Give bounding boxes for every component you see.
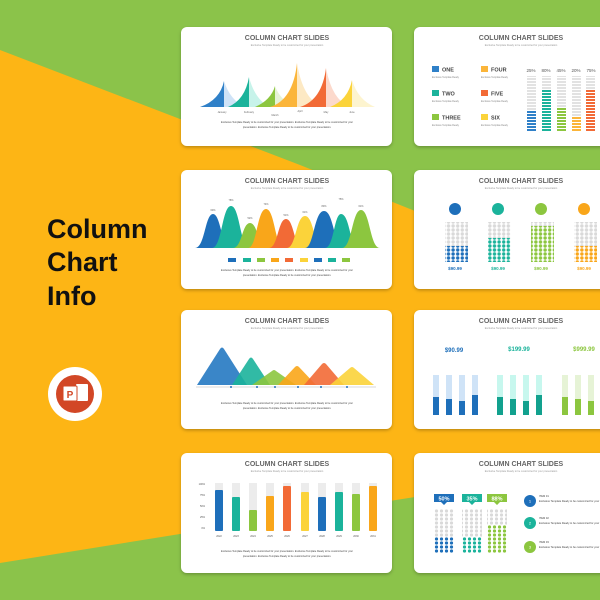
panel: card 3 bell curves: 61%	[358, 205, 364, 208]
panel: card 3 bell curves: Exclusive Template Ready to be customized for your presentation. Exclusive Template Ready to be customized for your	[221, 269, 353, 272]
panel: card 1 shark fin chart: January	[218, 111, 227, 114]
panel: card 4 dot grids with icons: COLUMN CHART SLIDES	[479, 178, 564, 185]
title: Column Chart Info	[47, 214, 148, 311]
panel: card 4 dot grids with icons: Exclusive Template Ready to be customized for your presentation	[485, 187, 558, 190]
panel: card 8 dot percentages: 3	[529, 544, 532, 550]
panel: card 2 striped bars: FIVE	[491, 92, 504, 98]
panel: card 1 shark fin chart: March	[272, 114, 279, 117]
panel: card 7 bar chart: Exclusive Template Ready to be customized for your presentation	[251, 470, 324, 473]
panel: card 7 bar chart: 2022	[216, 535, 222, 538]
panel: card 7 bar chart: 25%	[200, 516, 206, 519]
panel: card 3 bell curves: 61%	[302, 211, 308, 214]
panel: card 8 dot percentages	[414, 453, 600, 573]
panel: card 5 mountains: Exclusive Template Ready to be customized for your presentation	[251, 327, 324, 330]
panel: card 6 pricing bars: $90.99	[445, 348, 464, 354]
panel: card 1 shark fin chart: presentation. Exclusive Template Ready to be customized for your presentation.	[243, 126, 331, 129]
panel: card 4 dot grids with icons	[414, 170, 600, 289]
panel: card 5 mountains	[181, 310, 392, 429]
panel: card 7 bar chart: 75%	[200, 494, 206, 497]
panel: card 7 bar chart	[181, 453, 392, 573]
panel: card 1 shark fin chart: June	[349, 111, 355, 114]
panel: card 8 dot percentages: ITEM 03	[539, 540, 549, 544]
panel: card 3 bell curves: 74%	[263, 203, 269, 206]
panel: card 2 striped bars: THREE	[442, 116, 461, 122]
panel: card 1 shark fin chart: COLUMN CHART SLIDES	[245, 35, 330, 42]
panel: card 7 bar chart: COLUMN CHART SLIDES	[245, 461, 330, 468]
panel: card 3 bell curves	[181, 170, 392, 289]
panel: card 2 striped bars: Exclusive Template Ready	[481, 124, 509, 127]
panel: card 2 striped bars: Exclusive Template Ready	[481, 100, 509, 103]
panel: card 5 mountains: COLUMN CHART SLIDES	[245, 318, 330, 325]
panel: card 7 bar chart: 2031	[370, 535, 376, 538]
panel: card 8 dot percentages: 1	[529, 498, 532, 504]
title: Column Chart Info: Column	[47, 214, 148, 244]
icon: powerpoint	[48, 367, 102, 421]
icon: powerpoint: P	[67, 390, 74, 401]
panel: card 1 shark fin chart: May	[324, 111, 329, 114]
panel: card 5 mountains: Exclusive Template Ready to be customized for your presentation. Exclusive Template Ready to be customized for your	[221, 402, 353, 405]
panel: card 8 dot percentages: 2	[529, 520, 532, 526]
panel: card 1 shark fin chart	[181, 27, 392, 146]
panel: card 3 bell curves: Exclusive Template Ready to be customized for your presentation	[251, 187, 324, 190]
panel: card 4 dot grids with icons: $90.99	[448, 266, 462, 271]
panel: card 6 pricing bars: COLUMN CHART SLIDES	[479, 318, 564, 325]
panel: card 4 dot grids with icons: $90.99	[534, 266, 548, 271]
panel: card 2 striped bars: Exclusive Template Ready	[432, 124, 460, 127]
panel: card 7 bar chart: 2023	[233, 535, 239, 538]
panel: card 8 dot percentages: Exclusive Template Ready to be customized for your	[539, 499, 599, 503]
panel: card 6 pricing bars: Exclusive Template Ready to be customized for your presentation	[485, 327, 558, 330]
panel: card 2 striped bars: 25%	[526, 68, 536, 73]
panel: card 8 dot percentages: ITEM 01	[539, 494, 549, 498]
title: Column Chart Info: Chart	[47, 247, 118, 277]
panel: card 1 shark fin chart: February	[244, 111, 255, 114]
panel: card 3 bell curves: 51%	[283, 214, 289, 217]
panel: card 8 dot percentages: 35%	[466, 496, 478, 502]
panel: card 1 shark fin chart: Exclusive Template Ready to be customized for your presentation	[251, 44, 324, 47]
panel: card 2 striped bars: SIX	[491, 116, 500, 122]
panel: card 6 pricing bars: $999.99	[573, 347, 596, 353]
panel: card 1 shark fin chart: Exclusive Template Ready to be customized for your presentation. Exclusive Template Ready to be customized for your	[221, 121, 353, 124]
panel: card 3 bell curves: 78%	[228, 199, 234, 202]
panel: card 7 bar chart: 2025	[267, 535, 273, 538]
panel: card 7 bar chart: presentation. Exclusive Template Ready to be customized for your presentation.	[243, 555, 331, 558]
panel: card 1 shark fin chart: April	[297, 110, 303, 113]
panel: card 3 bell curves: 60%	[210, 209, 216, 212]
panel: card 3 bell curves: COLUMN CHART SLIDES	[245, 178, 330, 185]
panel: card 7 bar chart: 2029	[336, 535, 342, 538]
panel: card 2 striped bars	[414, 27, 600, 146]
panel: card 8 dot percentages: Exclusive Template Ready to be customized for your	[539, 521, 599, 525]
panel: card 3 bell curves: 80%	[321, 205, 327, 208]
panel: card 2 striped bars: 80%	[541, 68, 551, 73]
panel: card 7 bar chart: 100%	[199, 483, 206, 486]
panel: card 2 striped bars: 20%	[571, 68, 581, 73]
panel: card 2 striped bars: FOUR	[491, 68, 507, 74]
panel: card 2 striped bars: Exclusive Template Ready	[432, 100, 460, 103]
panel: card 8 dot percentages: Exclusive Template Ready to be customized for your presentation	[485, 470, 558, 473]
panel: card 7 bar chart: 2026	[284, 535, 290, 538]
panel: card 8 dot percentages: 88%	[491, 496, 503, 502]
panel: card 8 dot percentages: ITEM 02	[539, 516, 549, 520]
panel: card 3 bell curves: presentation. Exclusive Template Ready to be customized for your presentation.	[243, 274, 331, 277]
panel: card 2 striped bars: 45%	[556, 68, 566, 73]
title: Column Chart Info: Info	[47, 281, 96, 311]
panel: card 6 pricing bars	[414, 310, 600, 429]
panel: card 2 striped bars: 75%	[586, 68, 596, 73]
panel: card 8 dot percentages: COLUMN CHART SLIDES	[479, 461, 564, 468]
panel: card 2 striped bars: ONE	[442, 68, 454, 74]
panel: card 7 bar chart: 2024	[250, 535, 256, 538]
panel: card 3 bell curves: 52%	[247, 217, 253, 220]
panel: card 7 bar chart: 0%	[201, 527, 206, 530]
panel: card 8 dot percentages: Exclusive Template Ready to be customized for your	[539, 545, 599, 549]
panel: card 2 striped bars: TWO	[442, 92, 456, 98]
panel: card 4 dot grids with icons: $90.99	[577, 266, 591, 271]
panel: card 8 dot percentages: 50%	[438, 496, 450, 502]
panel: card 6 pricing bars: $199.99	[508, 347, 530, 353]
panel: card 2 striped bars: Exclusive Template Ready	[432, 76, 460, 79]
panel: card 7 bar chart: 2028	[319, 535, 325, 538]
panel: card 2 striped bars: Exclusive Template Ready	[481, 76, 509, 79]
panel: card 7 bar chart: 2030	[353, 535, 359, 538]
panel: card 3 bell curves: 75%	[338, 198, 344, 201]
panel: card 4 dot grids with icons: $90.99	[491, 266, 505, 271]
panel: card 7 bar chart: 2027	[302, 535, 308, 538]
panel: card 5 mountains: presentation. Exclusive Template Ready to be customized for your presentation.	[243, 407, 331, 410]
panel: card 2 striped bars: Exclusive Template Ready to be customized for your presentation	[485, 44, 558, 47]
panel: card 2 striped bars: COLUMN CHART SLIDES	[479, 35, 564, 42]
panel: card 7 bar chart: 50%	[200, 505, 206, 508]
panel: card 7 bar chart: Exclusive Template Ready to be customized for your presentation. Exclusive Template Ready to be customized for your	[221, 550, 353, 553]
